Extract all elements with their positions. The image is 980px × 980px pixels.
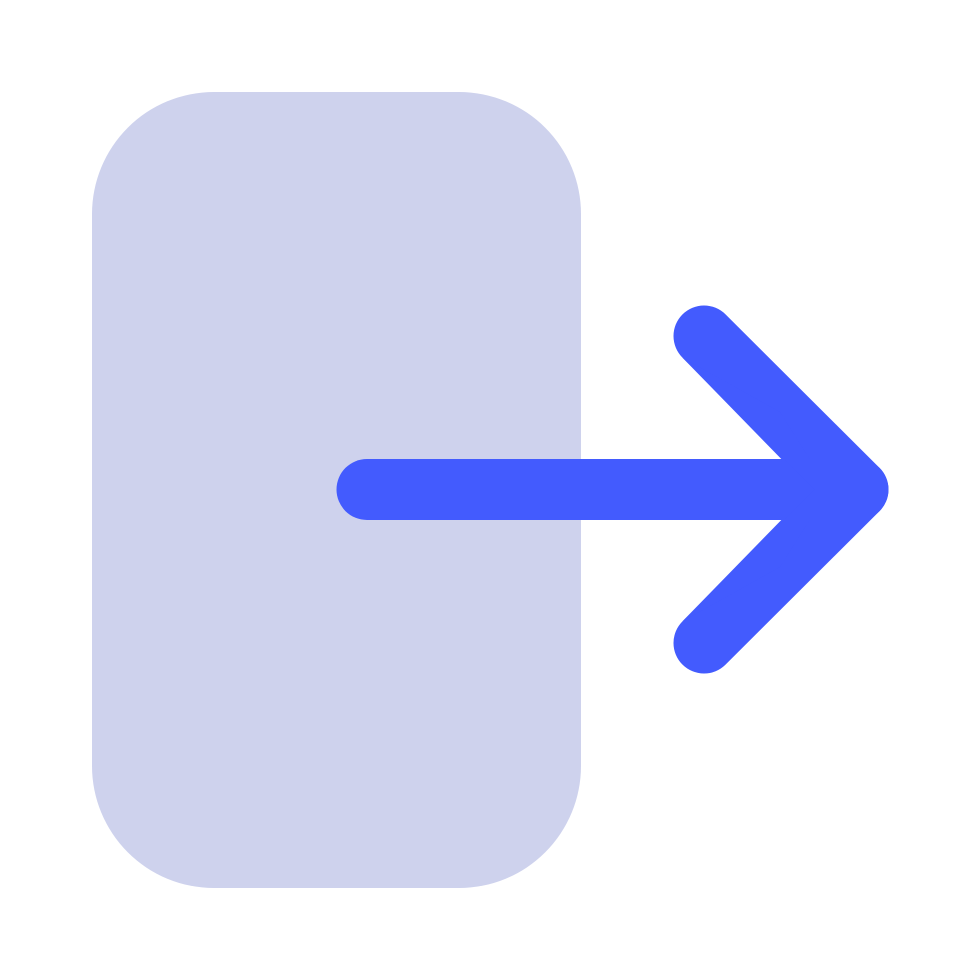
icon: arrow: [367, 336, 858, 643]
icon: door panel: [92, 92, 581, 888]
